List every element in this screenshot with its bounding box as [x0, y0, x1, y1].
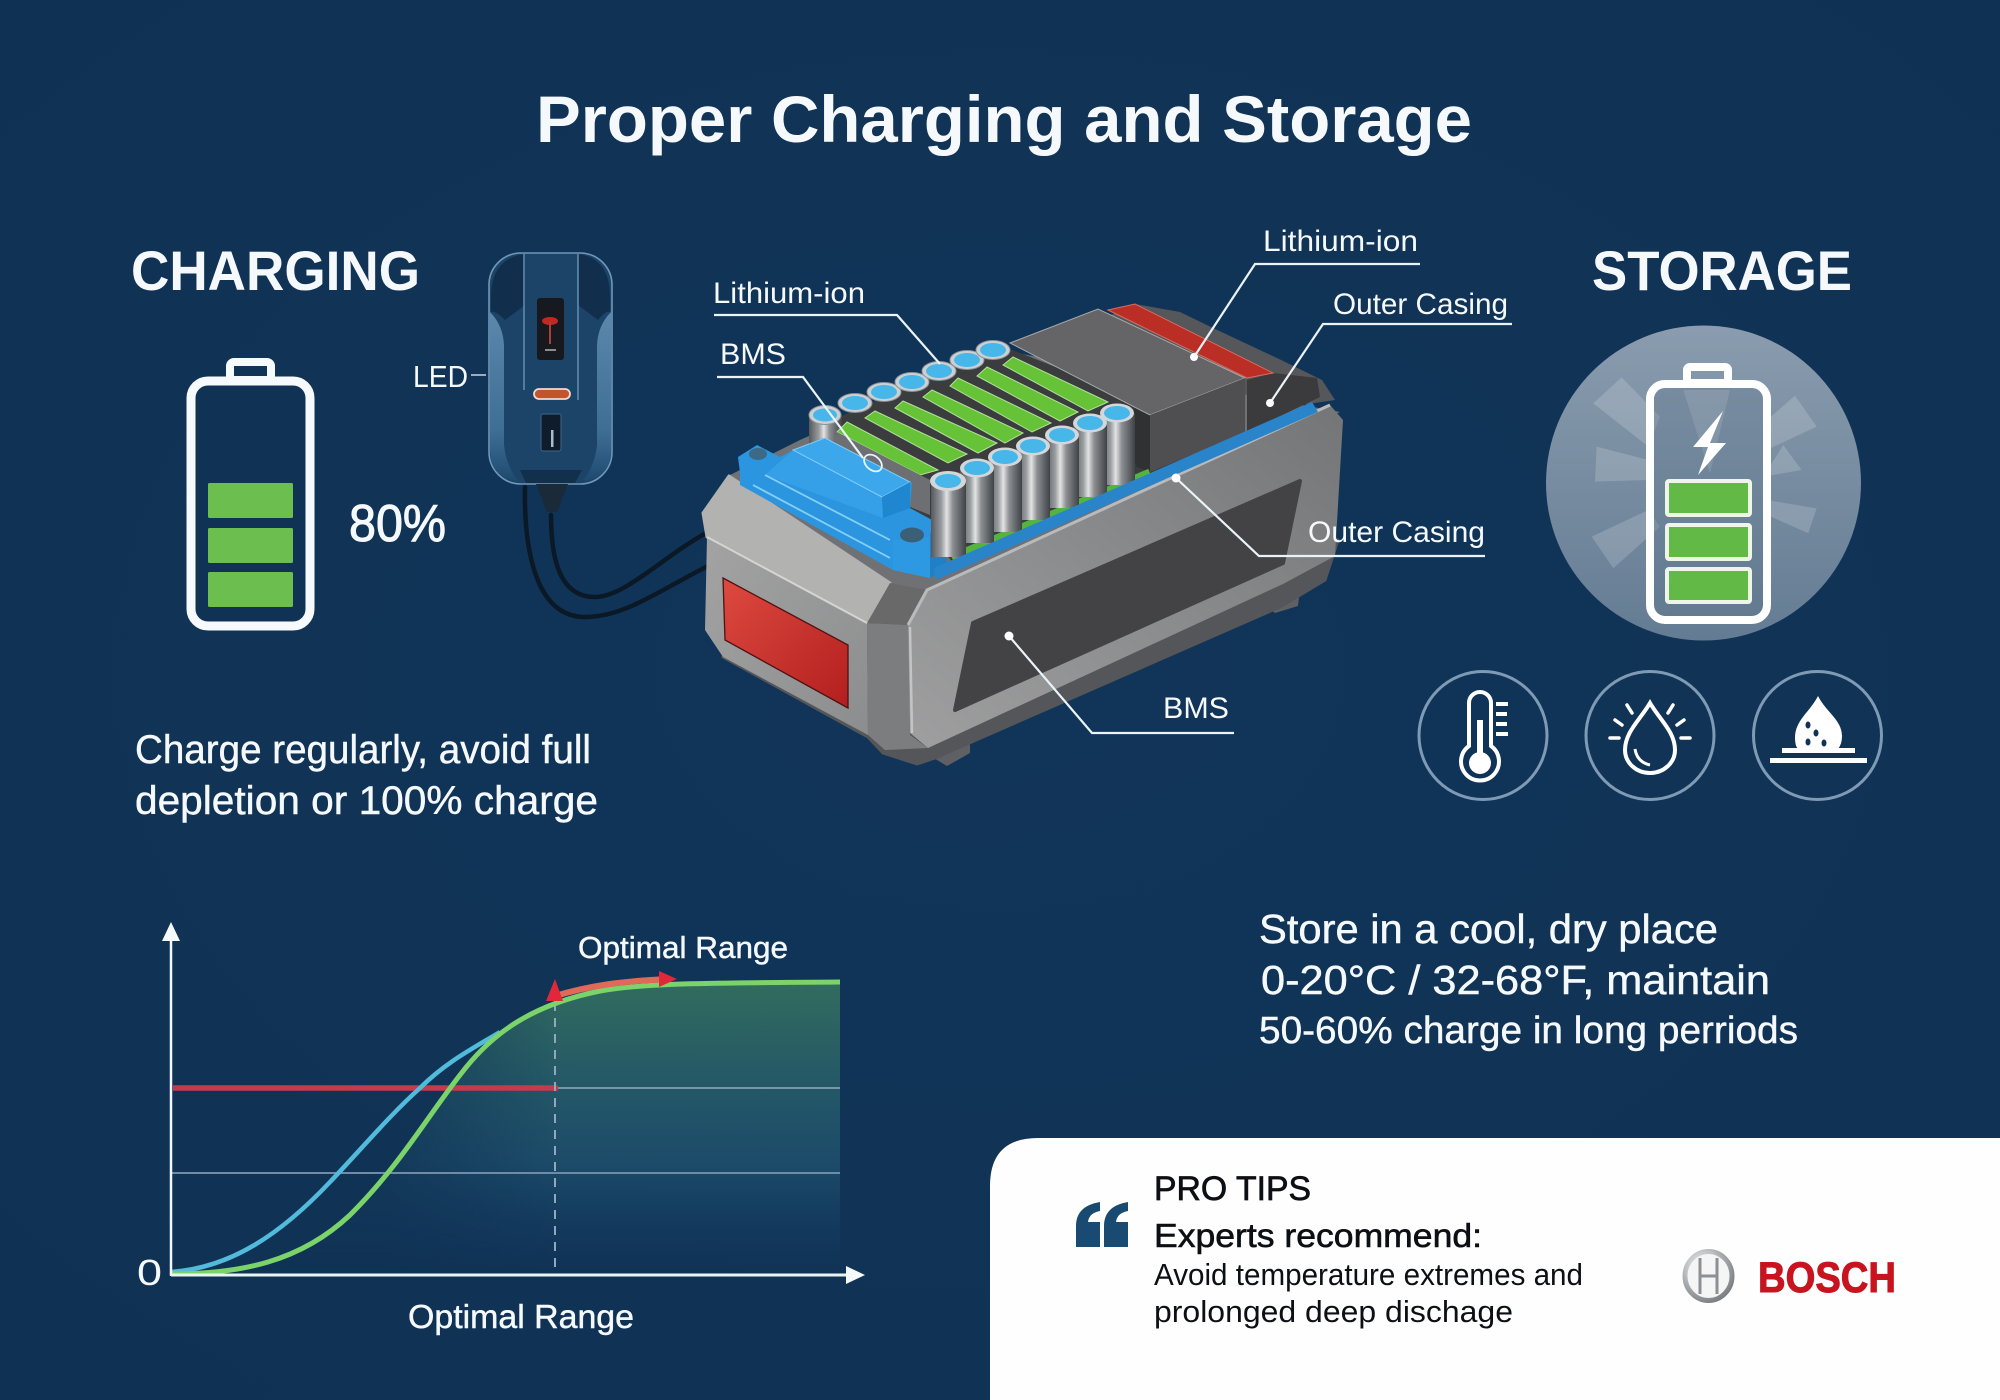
charging text: depletion or 100% charge [135, 779, 598, 823]
cell bed [833, 345, 1240, 565]
bolt [1693, 411, 1726, 475]
casing [703, 304, 1343, 764]
callout: BMS left [717, 338, 885, 475]
icon: thermometer [1419, 672, 1547, 800]
USB port [541, 414, 561, 451]
back cell row [809, 340, 1010, 445]
icon: battery at 80 percent [191, 362, 310, 626]
base green line [952, 473, 1150, 558]
heading: storage: STORAGE [1592, 239, 1852, 302]
callout: outer casing top [1266, 288, 1512, 407]
cell wall behind BMS [833, 432, 930, 515]
icon: moisture on surface [1754, 672, 1882, 800]
green curve [171, 982, 840, 1274]
icon: storage battery in circle [1546, 326, 1861, 640]
title: Proper Charging and Storage [536, 82, 1472, 156]
callout: lithium-ion top: Lithium-ion [1263, 225, 1418, 258]
heading: charging: CHARGING [131, 239, 420, 302]
storage text: 0-20°C / 32-68°F, maintain [1261, 957, 1770, 1003]
callout: outer casing right: Outer Casing [1308, 516, 1485, 549]
tips heading: PRO TIPS [1154, 1170, 1311, 1208]
blue seal strip [934, 402, 1318, 580]
panel: pro tips [990, 1138, 2000, 1400]
blue curve [171, 1032, 500, 1272]
tips body [1154, 1257, 1583, 1329]
callout: lithium-ion left: Lithium-ion [713, 277, 865, 310]
line chart [137, 922, 865, 1335]
bottom range label: Optimal Range [408, 1298, 634, 1335]
axis origin: 0 [137, 1252, 162, 1293]
red range arrows [546, 971, 677, 1001]
storage text [1259, 906, 1798, 1052]
storage text: 50-60% charge in long perriods [1259, 1010, 1798, 1052]
tips body: Avoid temperature extremes and [1154, 1257, 1583, 1292]
red label [723, 578, 848, 708]
callout: lithium-ion top [1190, 225, 1420, 361]
charging text: Charge regularly, avoid full [135, 728, 591, 772]
callout: BMS left: BMS [720, 338, 786, 371]
charge percentage: 80% [349, 495, 446, 553]
LED display [537, 298, 564, 360]
callout: lithium-ion left [713, 277, 940, 364]
LED label: LED [413, 359, 468, 394]
tips subheading: Experts recommend: [1154, 1217, 1482, 1254]
orange port [534, 389, 570, 399]
icon: quote marks [1076, 1202, 1128, 1247]
connector [536, 484, 568, 512]
threshold line [173, 1085, 558, 1091]
BMS module [738, 438, 947, 578]
feet [932, 588, 1300, 766]
storage charge cells [1667, 481, 1750, 602]
charging text [135, 728, 598, 823]
dark window [955, 481, 1300, 710]
callout: outer casing top: Outer Casing [1333, 288, 1508, 321]
callout: BMS bottom: BMS [1163, 692, 1229, 725]
logo: Bosch: BOSCH [1758, 1254, 1896, 1302]
storage text: Store in a cool, dry place [1259, 906, 1718, 952]
callout: BMS bottom [1004, 632, 1234, 733]
optimal area fill [400, 984, 840, 1224]
tips body: prolonged deep dischage [1154, 1294, 1513, 1329]
axes [162, 922, 865, 1284]
grey module block [1010, 304, 1320, 472]
top range label: Optimal Range [578, 930, 788, 965]
battery pack illustration [703, 304, 1343, 766]
front cell row [930, 404, 1135, 557]
cables [525, 487, 708, 617]
callout: outer casing right [1172, 474, 1485, 556]
logo: Bosch [1685, 1252, 1896, 1302]
icon: water drop [1586, 672, 1714, 800]
green cell strips [837, 357, 1108, 475]
charger with LED [489, 253, 612, 512]
